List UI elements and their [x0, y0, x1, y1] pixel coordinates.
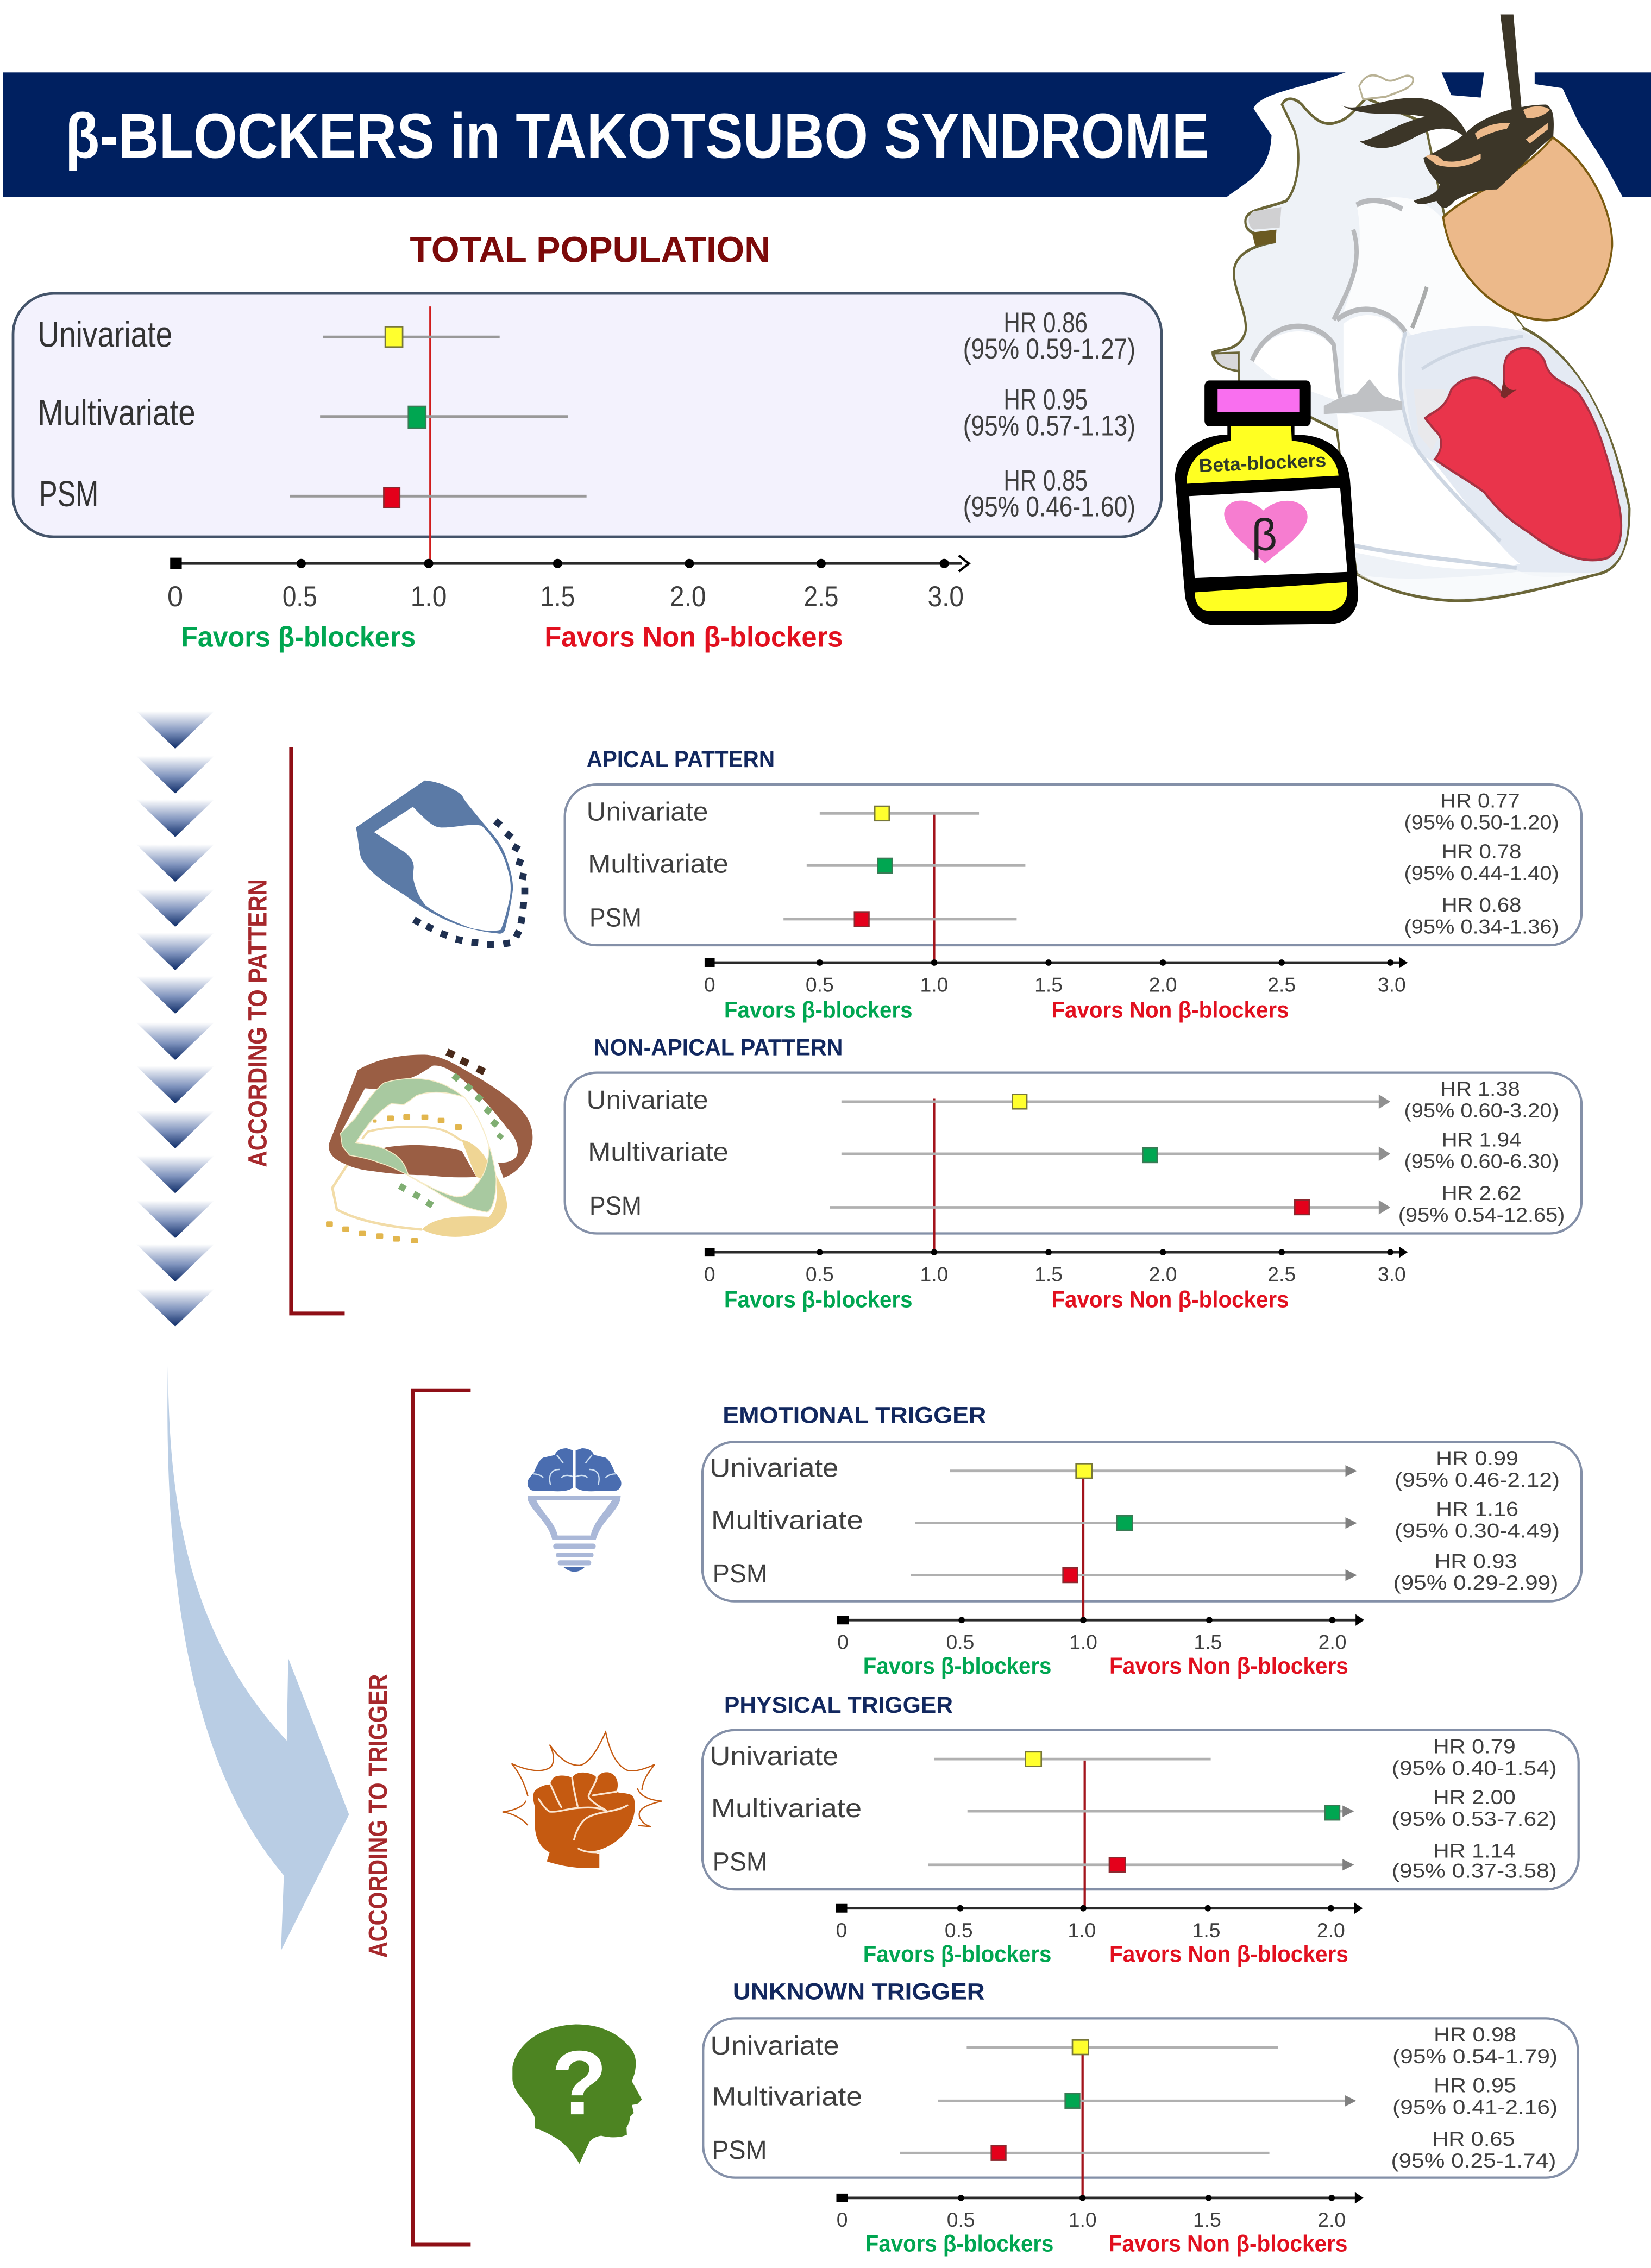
side label: ACCORDING TO TRIGGER	[364, 1674, 393, 1958]
axis: 2.5	[804, 581, 838, 613]
axis: 1.0	[920, 973, 948, 996]
heading: emotional trigger: EMOTIONAL TRIGGER	[723, 1403, 986, 1429]
favors labels	[863, 1653, 1348, 1679]
row: PSM	[713, 1549, 1558, 1594]
axis: 0.5	[947, 2208, 975, 2231]
favors labels: Favors β-blockers	[865, 2231, 1053, 2257]
title banner	[3, 72, 1651, 197]
row: multivariate: (95% 0.30-4.49)	[1395, 1519, 1560, 1542]
axis: 0	[837, 1631, 849, 1654]
axis: 0.5	[945, 1919, 973, 1942]
axis	[167, 556, 969, 613]
reference line	[1082, 2047, 1083, 2198]
axis: 3.0	[1378, 1262, 1406, 1285]
favors labels: Favors Non β-blockers	[1109, 1653, 1348, 1679]
axis	[837, 1614, 1364, 1654]
axis: 1.5	[540, 581, 575, 613]
row: multivariate: Multivariate	[712, 2082, 862, 2111]
row: PSM: (95% 0.29-2.99)	[1393, 1571, 1558, 1594]
axis	[836, 2192, 1364, 2231]
beta symbol on bottle: β	[1251, 510, 1277, 560]
illustration: takotsubo heart with pot	[1213, 14, 1629, 601]
axis: 0	[837, 2208, 848, 2231]
icon: clenched fist	[503, 1732, 662, 1868]
row: multivariate: (95% 0.44-1.40)	[1404, 862, 1559, 884]
row: multivariate: Multivariate	[37, 393, 196, 434]
row: univariate	[587, 789, 1559, 834]
favors labels	[724, 997, 1289, 1023]
axis: 2.0	[670, 581, 706, 613]
row: univariate: Univariate	[710, 1742, 838, 1771]
axis: 1.0	[1068, 1919, 1096, 1942]
row: multivariate	[588, 840, 1559, 884]
favors labels: Favors Non β-blockers	[1109, 1941, 1348, 1967]
forest plot: physical trigger	[702, 1730, 1579, 1967]
question mark: ?	[551, 2032, 607, 2134]
axis	[704, 1246, 1408, 1285]
row: univariate: Univariate	[587, 798, 708, 827]
row: PSM: HR 1.14	[1433, 1839, 1516, 1862]
chevron column	[136, 711, 215, 1327]
row: univariate: Univariate	[37, 315, 172, 355]
row: multivariate: (95% 0.60-6.30)	[1404, 1150, 1559, 1173]
row: multivariate: HR 0.95	[1003, 384, 1088, 416]
row: univariate	[711, 2023, 1558, 2068]
icon: brain light bulb	[528, 1448, 622, 1572]
favors labels: Favors Non β-blockers	[1109, 2231, 1348, 2257]
row: PSM: PSM	[713, 1848, 768, 1876]
row: multivariate: HR 0.78	[1442, 840, 1521, 863]
icon: non-apical pattern ventricle	[326, 1048, 532, 1243]
favors labels: Favors β-blockers	[863, 1653, 1051, 1679]
axis: 0	[836, 1919, 847, 1942]
reference line	[1084, 1761, 1085, 1908]
forest plot: apical pattern	[565, 784, 1581, 1023]
axis: 0.5	[806, 1262, 834, 1285]
row: PSM: (95% 0.46-1.60)	[963, 491, 1135, 523]
row: PSM: (95% 0.34-1.36)	[1404, 915, 1559, 938]
axis: 0.5	[946, 1631, 974, 1654]
row: multivariate: Multivariate	[588, 850, 729, 879]
row: univariate: (95% 0.54-1.79)	[1392, 2045, 1558, 2068]
row: multivariate: Multivariate	[711, 1794, 862, 1823]
row: multivariate: HR 2.00	[1433, 1786, 1516, 1808]
axis: 0	[704, 973, 715, 996]
axis: 1.0	[1069, 2208, 1097, 2231]
row: univariate: HR 0.77	[1440, 789, 1520, 812]
row: PSM: PSM	[589, 1192, 642, 1221]
row: multivariate: HR 1.16	[1436, 1497, 1518, 1520]
axis: 0	[704, 1262, 715, 1285]
panel	[13, 293, 1162, 537]
row: PSM: PSM	[39, 474, 98, 514]
axis: 0.5	[283, 581, 317, 613]
row: univariate	[710, 1447, 1560, 1491]
axis: 1.5	[1192, 1919, 1221, 1942]
row: multivariate	[712, 2074, 1558, 2118]
row: multivariate: (95% 0.41-2.16)	[1392, 2095, 1558, 2118]
row: multivariate: (95% 0.57-1.13)	[963, 410, 1135, 442]
reference line	[1083, 1471, 1084, 1620]
row: multivariate: Multivariate	[588, 1138, 729, 1167]
axis	[704, 957, 1408, 996]
bottle label text: Beta-blockers	[1198, 450, 1327, 476]
axis: 1.5	[1193, 2208, 1221, 2231]
favors labels: Favors β-blockers	[724, 997, 912, 1023]
axis: 2.5	[1267, 1262, 1296, 1285]
forest plot: non-apical pattern	[565, 1073, 1581, 1312]
row: PSM	[39, 465, 1135, 523]
favors labels: Favors Non β-blockers	[1051, 1286, 1289, 1312]
icon: beta-blocker bottle	[1175, 380, 1358, 625]
axis: 1.5	[1034, 973, 1063, 996]
favors labels: Favors β-blockers	[863, 1941, 1051, 1967]
axis	[836, 1902, 1363, 1942]
row: multivariate	[37, 384, 1135, 442]
favors labels	[865, 2231, 1348, 2257]
row: PSM: (95% 0.54-12.65)	[1398, 1203, 1565, 1226]
row: PSM	[713, 1839, 1557, 1882]
row: PSM: PSM	[712, 2136, 767, 2165]
row: univariate: (95% 0.46-2.12)	[1395, 1468, 1560, 1491]
row: univariate: (95% 0.59-1.27)	[963, 333, 1135, 365]
row: univariate: HR 0.79	[1433, 1735, 1516, 1757]
forest plot: emotional trigger	[702, 1442, 1581, 1679]
axis: 2.0	[1319, 1631, 1346, 1654]
favors labels	[724, 1286, 1289, 1312]
row: PSM: (95% 0.37-3.58)	[1392, 1859, 1557, 1882]
axis: 1.5	[1034, 1262, 1063, 1285]
icon: head with question mark	[512, 2025, 642, 2164]
arrow: large curved blue	[167, 1360, 349, 1951]
panel	[702, 1730, 1579, 1889]
axis: 1.0	[920, 1262, 948, 1285]
row: univariate: (95% 0.60-3.20)	[1404, 1099, 1559, 1122]
row: PSM: HR 2.62	[1442, 1182, 1521, 1204]
axis: 0.5	[806, 973, 834, 996]
axis: 1.5	[1194, 1631, 1222, 1654]
heading: unknown trigger: UNKNOWN TRIGGER	[733, 1979, 985, 2005]
heading: apical pattern: APICAL PATTERN	[587, 746, 775, 772]
heading: physical trigger: PHYSICAL TRIGGER	[724, 1692, 953, 1718]
row: PSM	[589, 894, 1559, 938]
axis: 3.0	[927, 581, 964, 613]
reference line	[430, 306, 431, 563]
row: multivariate	[588, 1128, 1559, 1173]
row: PSM	[589, 1182, 1565, 1226]
favors labels: Favors β-blockers	[724, 1286, 912, 1312]
panel	[565, 784, 1581, 945]
axis: 1.0	[1069, 1631, 1097, 1654]
row: univariate: (95% 0.50-1.20)	[1404, 811, 1559, 834]
forest plot: unknown trigger	[703, 2018, 1578, 2257]
row: univariate: HR 0.98	[1434, 2023, 1516, 2046]
heading: total population: TOTAL POPULATION	[410, 230, 770, 271]
bracket: according to pattern	[244, 747, 344, 1314]
axis: 2.0	[1317, 2208, 1346, 2231]
forest plot: total population	[13, 293, 1162, 654]
axis: 2.5	[1267, 973, 1296, 996]
row: PSM: HR 0.93	[1434, 1549, 1517, 1572]
heading: non-apical pattern: NON-APICAL PATTERN	[594, 1035, 843, 1061]
row: univariate: Univariate	[710, 1454, 838, 1482]
row: univariate: Univariate	[711, 2032, 839, 2060]
row: multivariate: (95% 0.53-7.62)	[1392, 1807, 1557, 1830]
favors labels	[863, 1941, 1348, 1967]
favors labels: Favors β-blockers	[181, 621, 416, 654]
panel	[565, 1073, 1581, 1233]
row: multivariate	[711, 1497, 1560, 1542]
row: PSM: HR 0.68	[1442, 894, 1521, 916]
row: PSM: HR 0.85	[1003, 465, 1088, 497]
row: univariate	[710, 1735, 1557, 1779]
row: PSM: (95% 0.25-1.74)	[1391, 2149, 1556, 2172]
favors labels	[181, 621, 843, 654]
row: univariate	[37, 307, 1135, 365]
row: PSM: HR 0.65	[1432, 2127, 1515, 2150]
panel	[703, 2018, 1578, 2178]
title: β-BLOCKERS in TAKOTSUBO SYNDROME	[65, 100, 1209, 172]
icon: apical pattern ventricle	[356, 781, 528, 948]
row: multivariate: HR 1.94	[1442, 1128, 1521, 1151]
row: PSM: PSM	[713, 1560, 768, 1588]
favors labels: Favors Non β-blockers	[1051, 997, 1289, 1023]
row: univariate: HR 0.99	[1436, 1447, 1518, 1469]
row: univariate: HR 1.38	[1440, 1077, 1520, 1100]
reference line	[933, 812, 934, 963]
axis: 0	[167, 581, 183, 613]
axis: 2.0	[1149, 1262, 1177, 1285]
bracket: according to trigger	[364, 1390, 470, 2245]
row: multivariate: Multivariate	[711, 1506, 863, 1535]
row: univariate	[587, 1077, 1559, 1122]
axis: 3.0	[1378, 973, 1406, 996]
reference line	[933, 1099, 934, 1252]
axis: 2.0	[1149, 973, 1177, 996]
panel	[702, 1442, 1581, 1601]
row: PSM	[712, 2127, 1556, 2172]
row: univariate: Univariate	[587, 1086, 708, 1115]
axis: 2.0	[1317, 1919, 1345, 1942]
side label: ACCORDING TO PATTERN	[244, 879, 273, 1167]
axis: 1.0	[411, 581, 447, 613]
row: multivariate	[711, 1786, 1557, 1830]
row: univariate: (95% 0.40-1.54)	[1392, 1756, 1557, 1779]
row: PSM: PSM	[589, 903, 642, 932]
favors labels: Favors Non β-blockers	[544, 621, 843, 654]
row: multivariate: HR 0.95	[1434, 2074, 1516, 2096]
row: univariate: HR 0.86	[1003, 307, 1088, 339]
